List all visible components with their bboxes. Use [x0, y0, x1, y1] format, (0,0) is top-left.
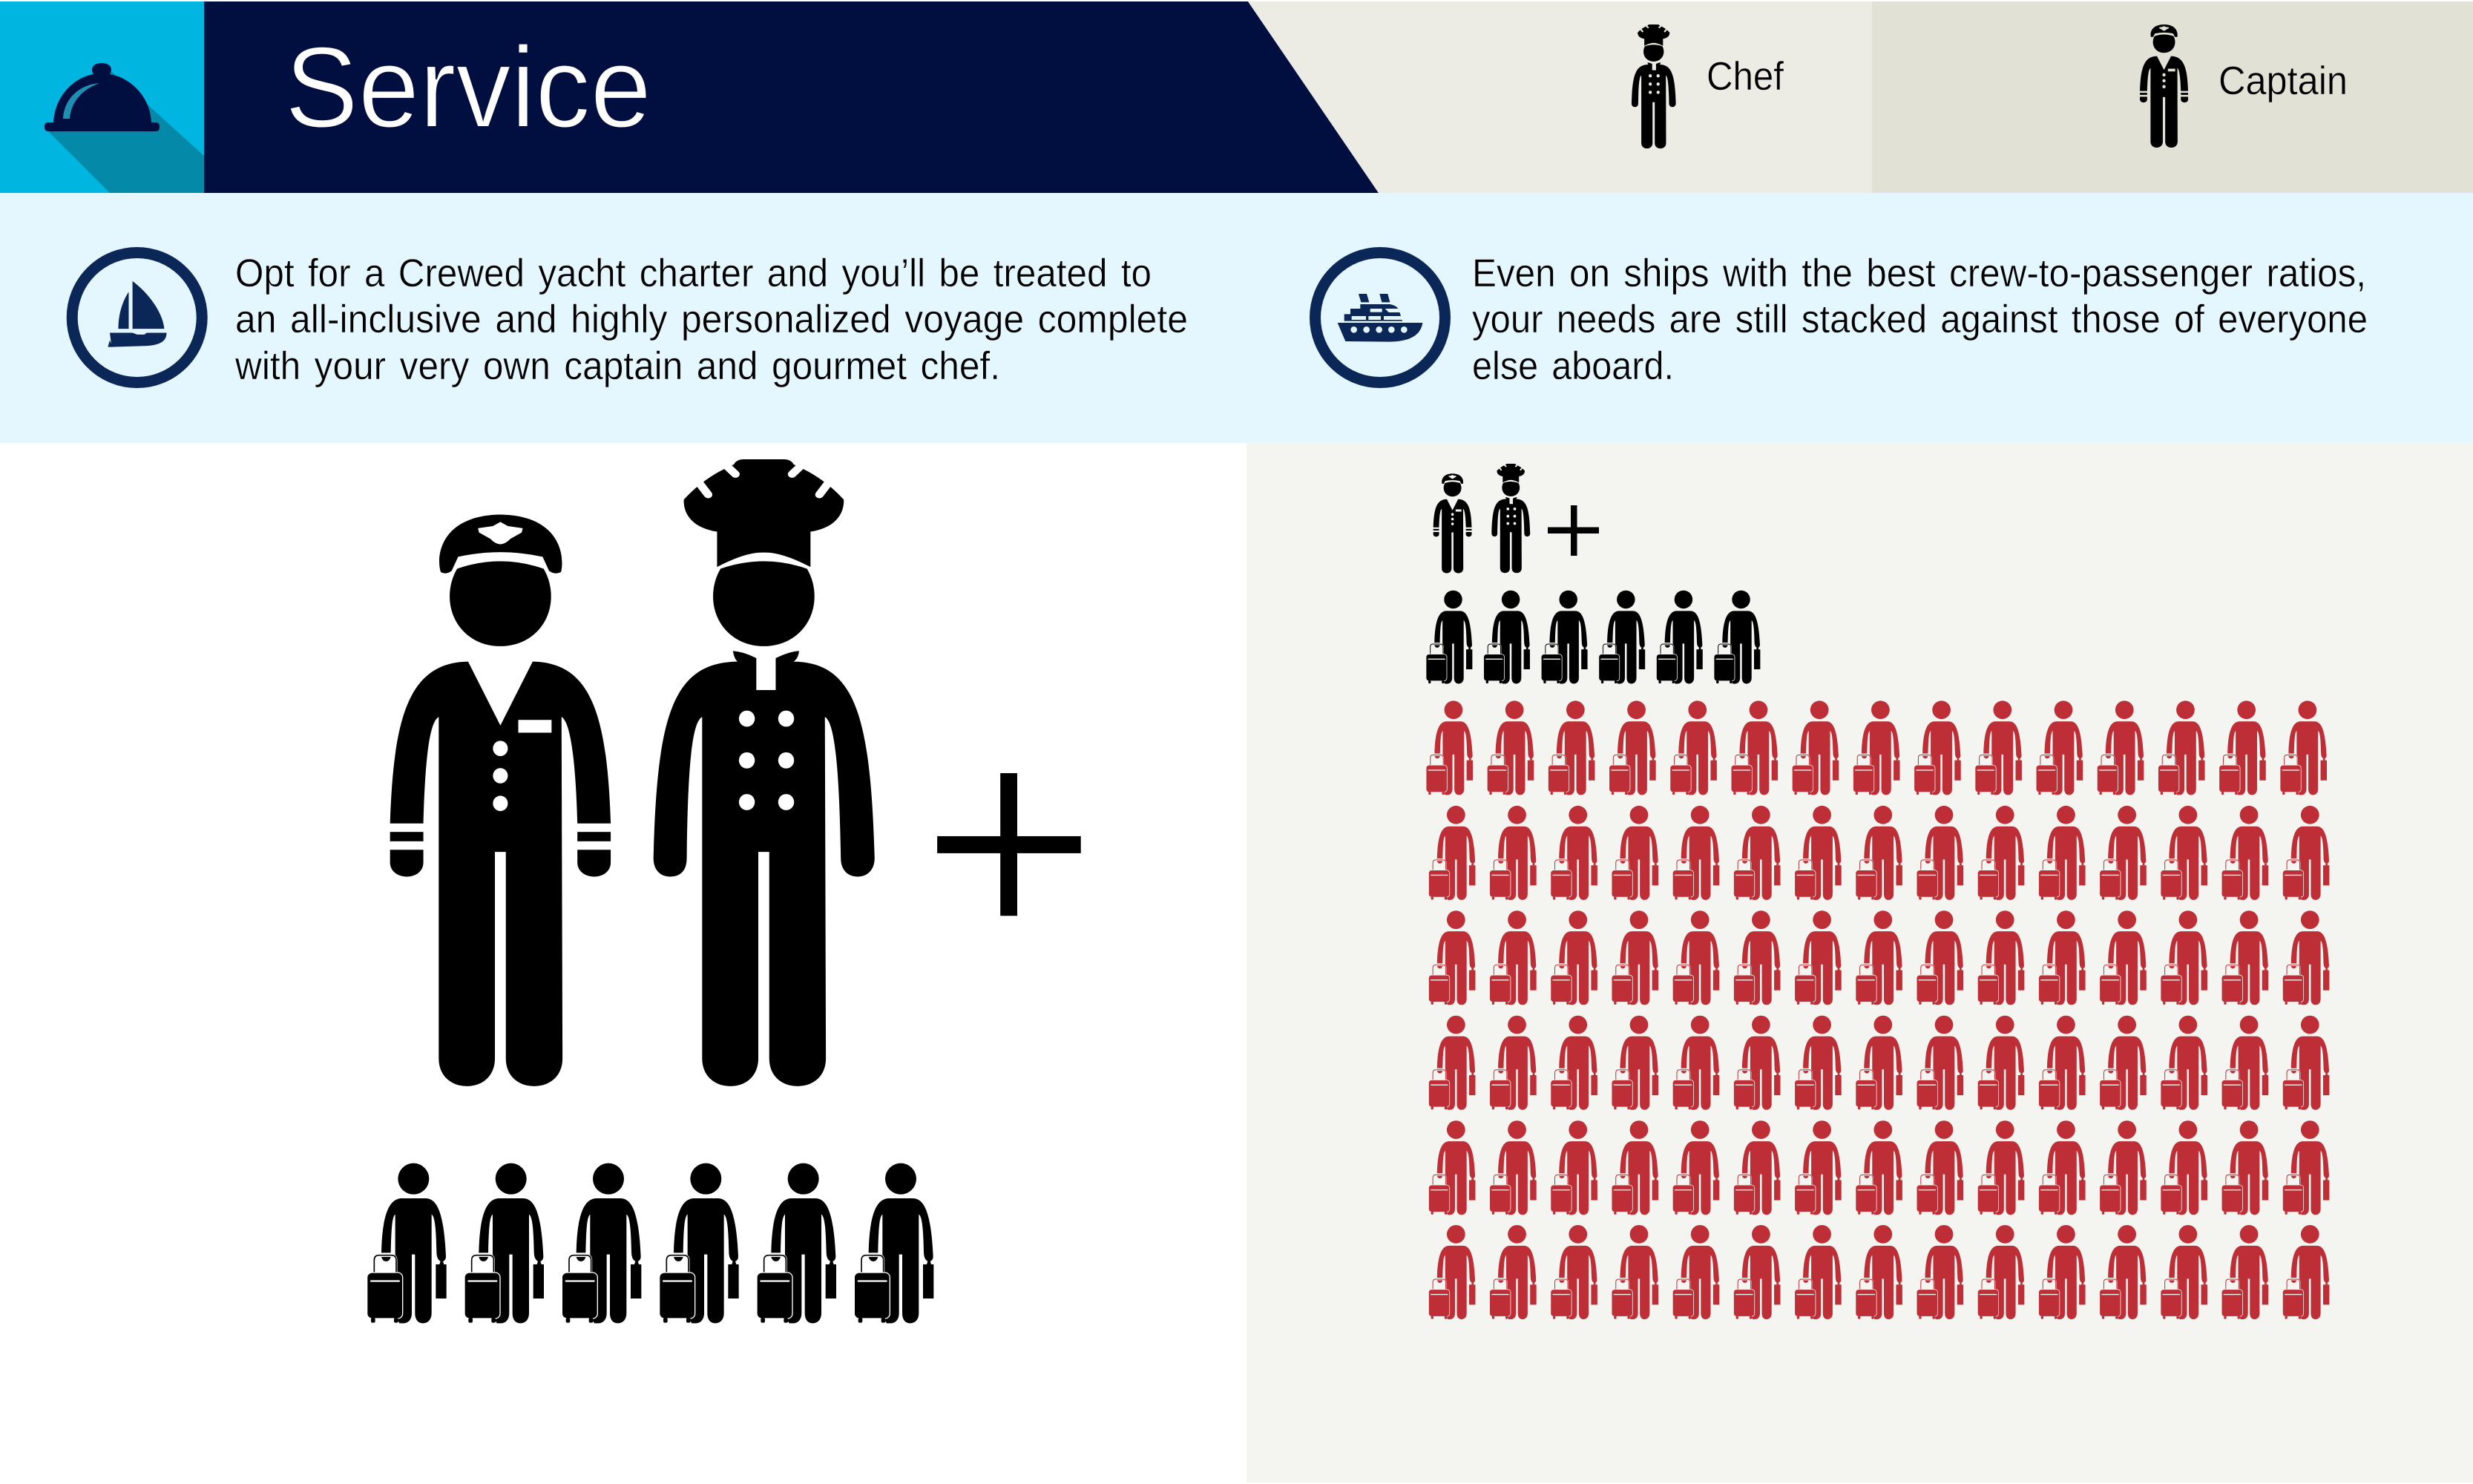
icon: chef figure	[1632, 24, 1676, 148]
icon: small plus	[1548, 505, 1599, 556]
chef label: Chef	[1707, 54, 1784, 99]
text block: crewed yacht charter: an all-inclusive and highly personalized voyage complete	[235, 298, 1188, 341]
legend: captain	[2140, 24, 2348, 148]
legend panel: captain background	[1872, 1, 2473, 193]
title: Service	[285, 23, 651, 151]
icon: cruise ship in ring	[1315, 252, 1445, 383]
icon: captain figure	[2140, 24, 2188, 148]
red row 2	[1428, 806, 2329, 900]
header band	[0, 1, 2473, 193]
icon: captain	[390, 515, 611, 1086]
navy title banner	[204, 1, 1379, 193]
passengers: red grid of ninety	[1426, 700, 2329, 1319]
red row 1	[1426, 700, 2327, 795]
text block: cruise ship crew ratio: Even on ships with the best crew-to-passenger ratios,	[1472, 252, 2366, 295]
passengers: yacht row of six	[367, 1163, 933, 1323]
passengers: black row of six	[1426, 591, 1760, 683]
icon: small chef	[1491, 464, 1530, 573]
small crew: captain and chef	[1433, 464, 1530, 573]
red row 3	[1428, 910, 2329, 1005]
icon: small captain	[1433, 473, 1472, 573]
figure group: large captain and chef	[390, 459, 875, 1086]
text block: cruise ship crew ratio: your needs are still stacked against those of everyone	[1472, 298, 2368, 341]
red row 4	[1428, 1016, 2329, 1110]
captain label: Captain	[2219, 59, 2348, 103]
panel: cruise ship background	[1247, 443, 2473, 1483]
red row 5	[1428, 1120, 2329, 1215]
legend panel: chef background	[1248, 1, 1872, 193]
icon: chef	[654, 459, 875, 1086]
text block: crewed yacht charter: Opt for a Crewed yacht charter and you’ll be treated to	[235, 252, 1152, 295]
text block: crewed yacht charter: with your very own captain and gourmet chef.	[234, 344, 1000, 388]
red row 6	[1428, 1225, 2329, 1319]
intro band	[0, 193, 2473, 443]
icon: large plus	[937, 773, 1081, 916]
icon: service cloche	[45, 63, 204, 193]
legend: chef	[1632, 24, 1784, 148]
cyan icon tile	[0, 1, 204, 193]
text block: cruise ship crew ratio: else aboard.	[1472, 344, 1674, 388]
icon: sailboat in ring	[72, 252, 202, 383]
